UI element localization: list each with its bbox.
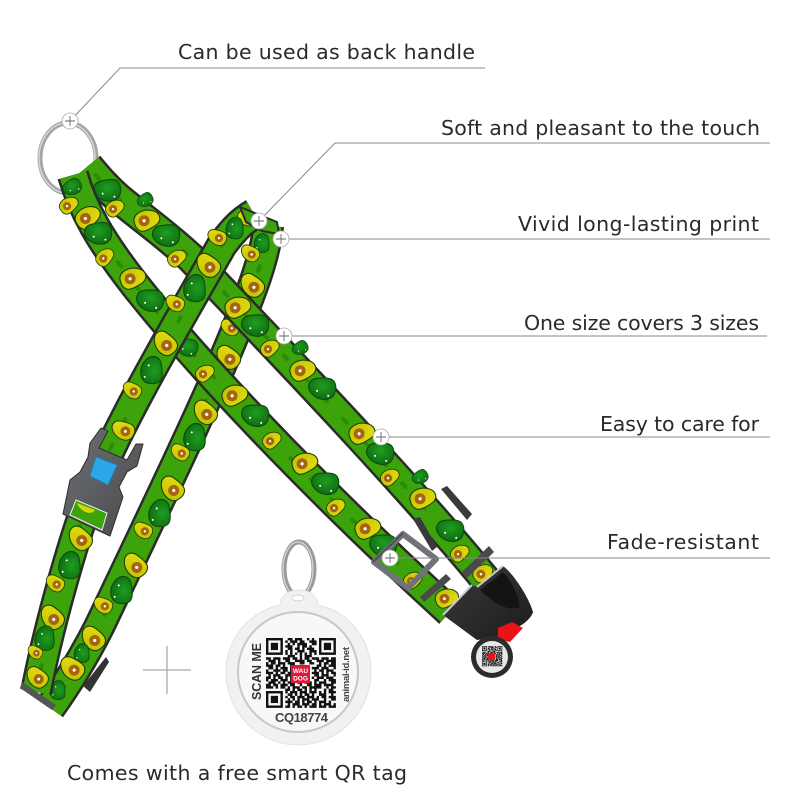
callout: fade resistant [382, 530, 770, 566]
QR code [266, 639, 336, 707]
strap fold at top [240, 207, 279, 234]
big smart QR tag [226, 542, 371, 745]
tag face [238, 612, 358, 732]
callout: vivid print [273, 212, 770, 247]
WAU DOG logo: DOG [293, 676, 308, 682]
icon: adjuster buckle [373, 533, 436, 588]
tag split ring [283, 542, 314, 596]
callout: back handle [62, 40, 485, 129]
icon: small QR tag [471, 622, 523, 678]
plus mark [143, 646, 191, 694]
callout: back handle: Can be used as back handle [178, 40, 475, 64]
tag hole [292, 595, 304, 601]
icon: strap keepers [413, 486, 494, 602]
tag body [226, 590, 371, 745]
harness straps with avocado print [23, 166, 496, 708]
callout: easy care: Easy to care for [600, 412, 760, 436]
WAU DOG logo: WAU [293, 668, 308, 675]
website text: animal-id.net [341, 646, 352, 702]
callout: fade resistant: Fade-resistant [607, 530, 759, 554]
icon: lower slider [20, 657, 109, 710]
callout: easy care [373, 412, 770, 445]
callout: one size: One size covers 3 sizes [524, 311, 759, 335]
icon: side release buckle [63, 428, 143, 536]
strap: upper long strand [88, 166, 496, 585]
callout: vivid print: Vivid long-lasting print [518, 212, 759, 236]
caption: free tag: Comes with a free smart QR tag [67, 761, 407, 785]
callout: soft [251, 116, 770, 229]
SCAN ME text: SCAN ME [250, 643, 264, 700]
icon: black end cap [443, 566, 533, 640]
strap: front crossing strand [23, 208, 259, 692]
callout: one size [276, 311, 767, 344]
icon: metal ring [39, 123, 96, 193]
WAU DOG logo [291, 665, 310, 683]
callout: soft: Soft and pleasant to the touch [441, 116, 760, 140]
tag code: CQ18774 [275, 710, 329, 725]
strap: rear strand [49, 226, 271, 708]
strap: lower long strand [57, 175, 461, 612]
